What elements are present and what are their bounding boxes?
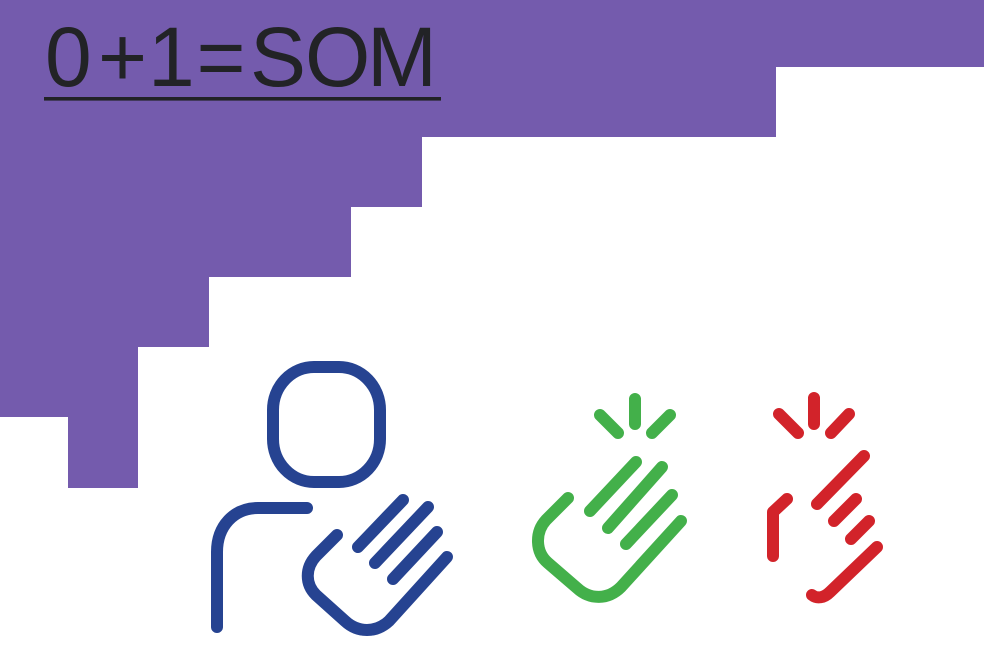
raised hand: [308, 500, 447, 630]
snap sparks: [600, 399, 670, 433]
fingers: [590, 462, 672, 544]
palm edge: [812, 547, 877, 597]
head: [273, 367, 380, 482]
panel: purple staircase background: [0, 0, 984, 488]
icon: green snapping hand: [538, 399, 681, 597]
icon: red snapping hand: [773, 398, 877, 597]
palm outline: [538, 498, 681, 597]
fingers: [817, 456, 869, 539]
thumb: [773, 499, 787, 556]
title: 0+1=SOM: [45, 10, 437, 104]
icon: person raising hand: [217, 367, 447, 630]
snap sparks: [779, 398, 849, 433]
shoulder and arm: [217, 508, 307, 627]
